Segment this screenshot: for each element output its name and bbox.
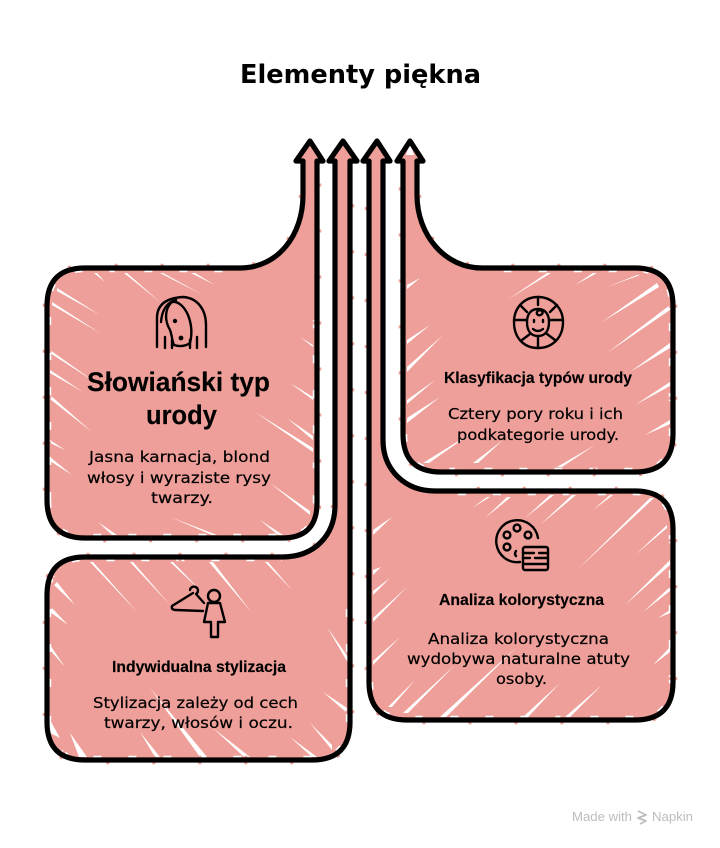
description: Analiza kolorystyczna <box>428 630 609 648</box>
heading: Indywidualna stylizacja <box>112 659 286 676</box>
outline <box>397 141 673 472</box>
description: Stylizacja zależy od cech <box>93 694 298 712</box>
footer: Made with Napkin: Napkin <box>652 810 693 824</box>
panel: Klasyfikacja typów urody <box>397 141 673 472</box>
heading <box>87 367 270 430</box>
description: wydobywa naturalne atuty <box>407 650 630 668</box>
heading: urody <box>146 400 217 430</box>
footer: Made with Napkin: Made with <box>572 810 632 824</box>
footer: Made with Napkin <box>572 810 693 824</box>
description <box>448 405 623 444</box>
description: twarzy. <box>151 489 213 507</box>
panel: Analiza kolorystyczna <box>363 141 673 720</box>
description: Cztery pory roku i ich <box>448 405 623 423</box>
description: podkategorie urody. <box>457 426 619 444</box>
heading: Słowiański typ <box>87 367 270 397</box>
description: włosy i wyraziste rysy <box>87 469 271 487</box>
description <box>407 630 630 688</box>
icon: palette and swatches <box>496 520 548 570</box>
outline <box>47 141 357 760</box>
icon: Napkin logo <box>638 811 646 824</box>
outline <box>47 141 323 538</box>
title: Elementy piękna <box>240 60 481 90</box>
icon: face in wheel <box>514 297 563 348</box>
description: twarzy, włosów i oczu. <box>104 714 293 732</box>
heading: Analiza kolorystyczna <box>439 592 604 609</box>
icon: hanger and person <box>172 587 225 637</box>
description <box>87 448 271 507</box>
description <box>93 694 298 732</box>
panel: Indywidualna stylizacja <box>47 141 357 760</box>
outline <box>363 141 673 720</box>
description: Jasna karnacja, blond <box>88 448 270 466</box>
panel: Słowiański typ urody <box>47 141 323 538</box>
heading: Klasyfikacja typów urody <box>444 370 632 387</box>
description: osoby. <box>496 670 547 688</box>
icon: woman with long hair <box>157 297 206 348</box>
